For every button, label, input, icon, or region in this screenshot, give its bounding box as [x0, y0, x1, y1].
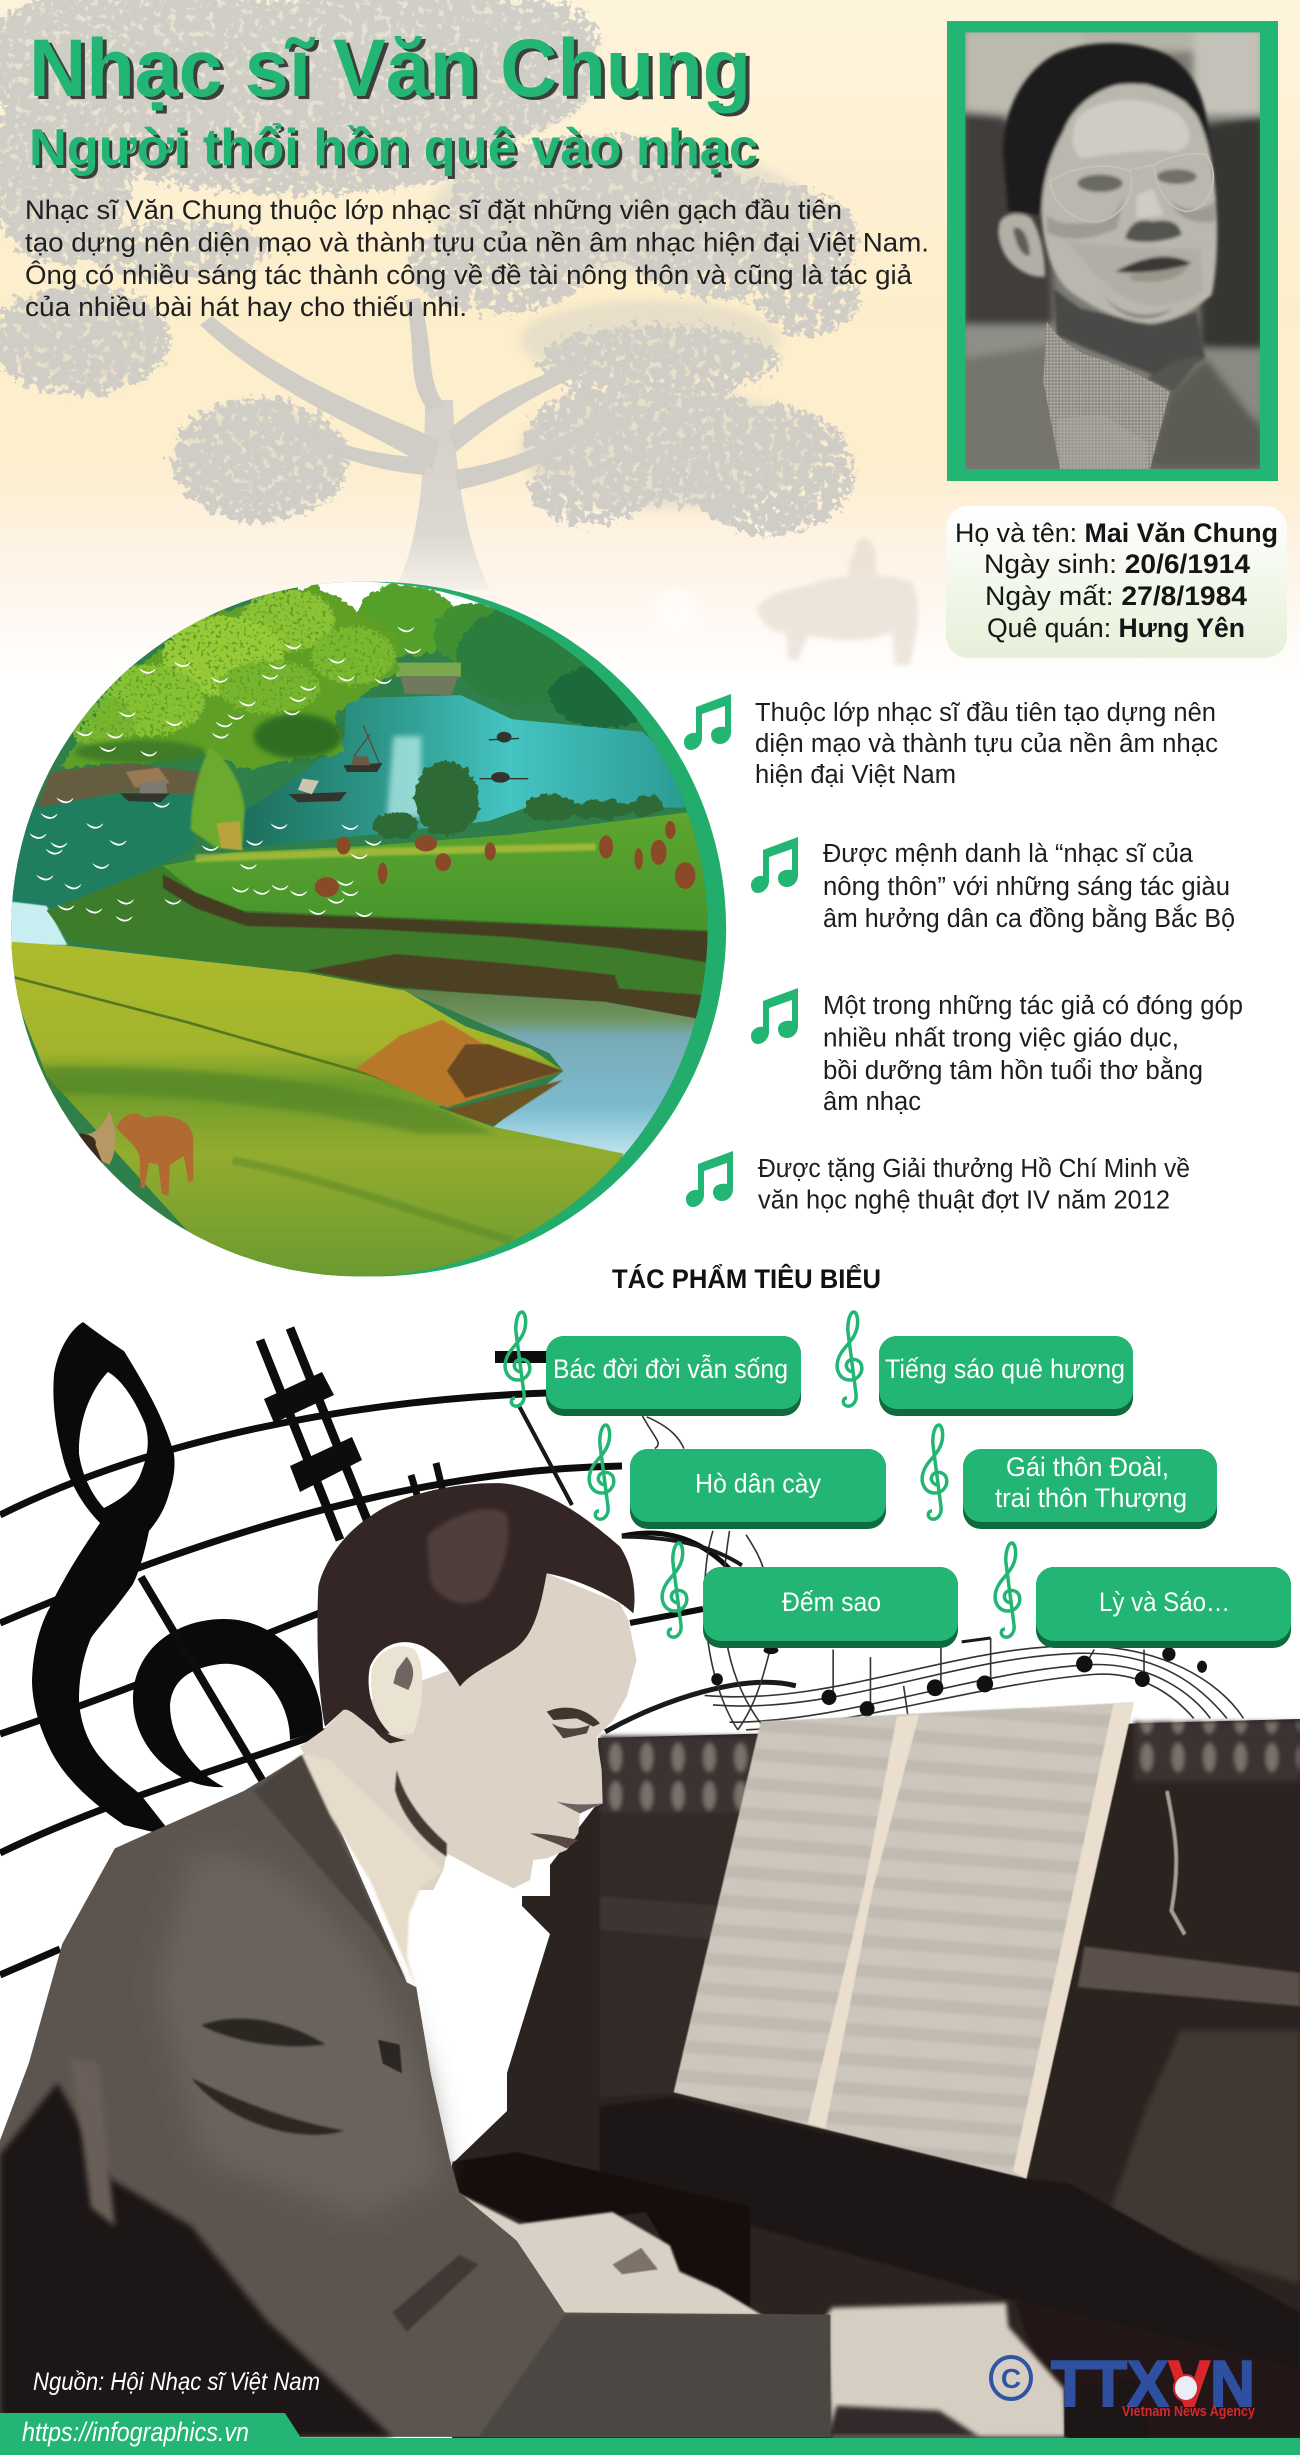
sharp sign	[260, 1328, 368, 1540]
button: Gái thôn Đoài, trai thôn Thượng	[922, 1425, 1217, 1529]
open score	[674, 1702, 1133, 2178]
info box: Quê quán: Hưng Yên	[987, 613, 1245, 643]
tree trunk	[395, 400, 490, 590]
pianist photo	[0, 1483, 1300, 2438]
logo: TTXVN: Vietnam News Agency	[1122, 2403, 1256, 2420]
heading: representative works: TÁC PHẨM TIÊU BIỂU	[612, 1263, 881, 1294]
subtitle: Người thổi hồn quê vào nhạc	[29, 119, 758, 177]
left bright trees	[61, 584, 400, 770]
info box: Họ và tên: Mai Văn Chung	[955, 518, 1278, 548]
meadow	[9, 942, 624, 1281]
bullet 1: diện mạo và thành tựu của nền âm nhạc	[755, 730, 1218, 758]
middle grass terrace	[163, 812, 717, 930]
icon: music note	[751, 837, 798, 893]
tree silhouette	[0, 0, 860, 590]
bullet 3: bồi dưỡng tâm hồn tuổi thơ bằng	[823, 1056, 1203, 1085]
bullet 2	[751, 837, 1235, 933]
left water	[9, 794, 196, 913]
button: Gái thôn Đoài, trai thôn Thượng: Gái thôn Đoài,	[1006, 1452, 1169, 1482]
ear	[371, 1646, 422, 1737]
button: Gái thôn Đoài, trai thôn Thượng: trai thôn Thượng	[995, 1483, 1187, 1513]
lower water	[396, 988, 703, 1158]
info box: Ngày sinh: 20/6/1914	[984, 549, 1250, 579]
jacket	[0, 1753, 830, 2437]
boats	[120, 725, 528, 802]
info box: Ngày mất: 27/8/1984	[985, 581, 1247, 611]
shirt collar	[301, 1753, 443, 1987]
keyboard and left hand	[452, 2152, 766, 2322]
intro text	[25, 195, 929, 322]
bullet 1: Thuộc lớp nhạc sĩ đầu tiên tạo dựng nên	[755, 699, 1216, 727]
cows	[315, 821, 695, 897]
intro text: Ông có nhiều sáng tác thành công về đề tài nông thôn và cũng là tác giả	[25, 260, 912, 290]
far trees	[354, 584, 661, 727]
bullet 4: Được tặng Giải thưởng Hồ Chí Minh về	[758, 1155, 1190, 1183]
big treble clef	[32, 1322, 175, 1837]
footer bar	[0, 2413, 1300, 2455]
work buttons	[505, 1312, 1291, 1648]
white birds	[29, 626, 421, 921]
button: Tiếng sáo quê hương: Tiếng sáo quê hương	[885, 1354, 1125, 1384]
bullet 4	[686, 1151, 1190, 1215]
bullet 2: Được mệnh danh là “nhạc sĩ của	[823, 840, 1194, 868]
info box	[946, 506, 1287, 658]
river	[242, 695, 689, 848]
sheet music swirl	[518, 1405, 1244, 1732]
logo: TTXVN: TTXVN	[1051, 2347, 1255, 2420]
intro text: của nhiều bài hát hay cho thiếu nhi.	[25, 292, 467, 322]
right hand	[825, 2303, 1149, 2437]
button: Hò dân cày	[589, 1425, 886, 1529]
buffalo and rider silhouette	[757, 539, 918, 665]
face and neck	[300, 1573, 637, 1890]
bullet 2: âm hưởng dân ca đồng bằng Bắc Bộ	[823, 904, 1235, 933]
intro text: Nhạc sĩ Văn Chung thuộc lớp nhạc sĩ đặt những viên gạch đầu tiên	[25, 195, 842, 225]
landscape circle photo	[0, 580, 726, 1281]
icon: music note	[684, 694, 731, 750]
piano	[452, 1702, 1300, 2438]
intro text: tạo dựng nên diện mạo và thành tựu của nền âm nhạc hiện đại Việt Nam.	[25, 228, 929, 258]
icon: music note	[686, 1151, 733, 1207]
background	[0, 0, 1300, 680]
bushes	[372, 761, 663, 839]
title	[29, 23, 758, 177]
icon: music note	[751, 988, 798, 1044]
button: Tiếng sáo quê hương	[837, 1312, 1133, 1416]
button: Đếm sao	[662, 1543, 958, 1648]
scarf	[1043, 322, 1170, 469]
head	[300, 1483, 637, 1890]
lower dark terrace	[47, 866, 717, 1020]
source: Nguồn: Hội Nhạc sĩ Việt Nam	[33, 2368, 320, 2396]
button: Bác đời đời vẫn sống: Bác đời đời vẫn sống	[553, 1353, 788, 1384]
button: Hò dân cày: Hò dân cày	[695, 1469, 821, 1499]
button: Lỳ và Sáo	[995, 1543, 1291, 1648]
bullet 1: hiện đại Việt Nam	[755, 761, 956, 789]
green crescent	[24, 582, 726, 1276]
bullet 3: nhiều nhất trong việc giáo dục,	[823, 1024, 1179, 1052]
bullet 3	[751, 988, 1243, 1116]
bullet 3: âm nhạc	[823, 1088, 921, 1116]
portrait frame	[947, 21, 1278, 481]
button: Đếm sao: Đếm sao	[782, 1587, 881, 1617]
portrait photo	[947, 21, 1278, 481]
horses	[79, 1111, 193, 1196]
eroded orange bank	[356, 1020, 563, 1108]
bullet 2: nông thôn” với những sáng tác giàu	[823, 873, 1230, 901]
bullet 4: văn học nghệ thuật đợt IV năm 2012	[758, 1187, 1170, 1215]
bullet 3: Một trong những tác giả có đóng góp	[823, 992, 1243, 1020]
title: Nhạc sĩ Văn Chung	[29, 23, 751, 114]
button: Lỳ và Sáo: Lỳ và Sáo…	[1099, 1587, 1230, 1617]
sun glow	[655, 590, 699, 634]
website: https://infographics.vn	[22, 2417, 249, 2447]
logo: TTXVN: C	[1001, 2363, 1021, 2394]
bullet 1	[684, 694, 1218, 789]
small tree	[191, 747, 245, 850]
button: Bác đời đời vẫn sống	[505, 1312, 801, 1416]
staff lines and big treble clef	[0, 1322, 735, 1975]
hair	[317, 1483, 635, 1733]
